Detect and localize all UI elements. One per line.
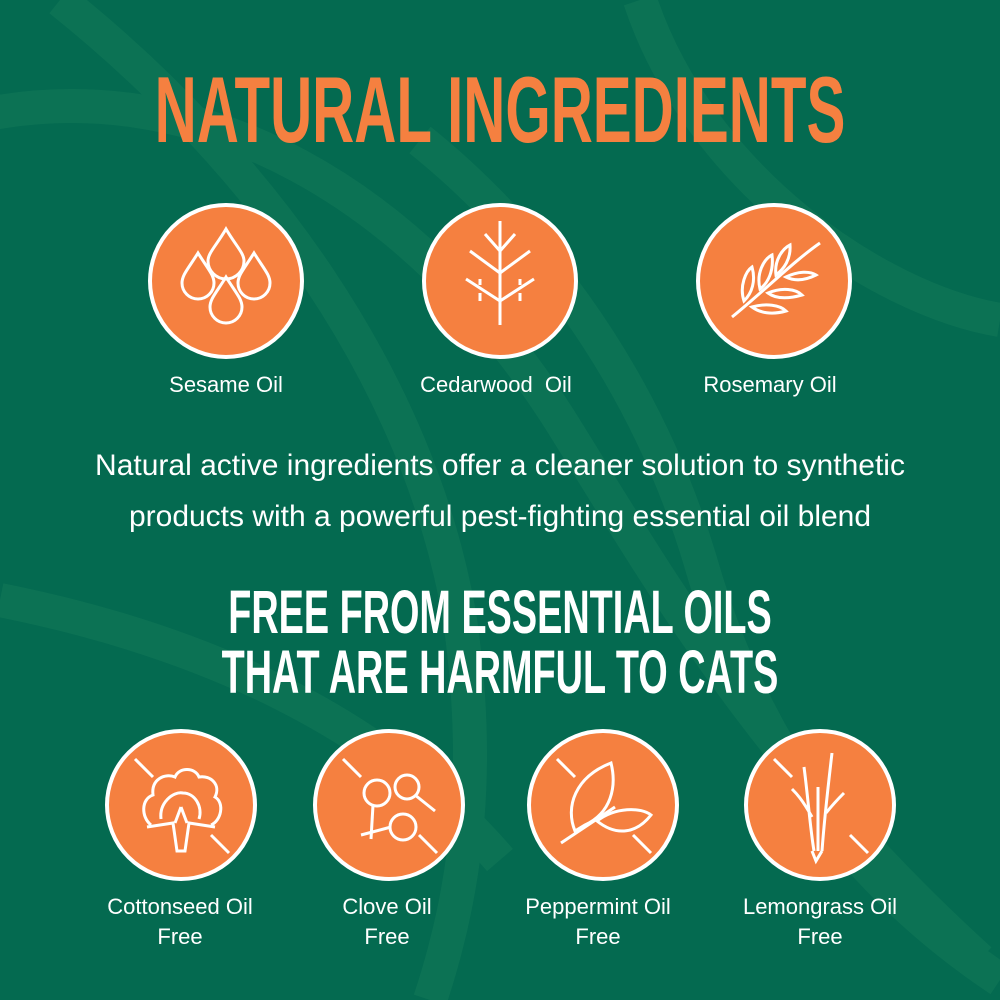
icon: cedarwood	[422, 203, 578, 359]
labels top: Sesame Oil	[169, 372, 283, 397]
labels bottom: Cottonseed Oil	[107, 894, 253, 919]
text: Free	[797, 924, 843, 949]
icon: rosemary	[696, 203, 852, 359]
icon: cotton	[105, 729, 257, 881]
labels bottom	[107, 894, 253, 949]
subheading	[222, 578, 778, 706]
icon: sesame oil drops	[148, 203, 304, 359]
text: Free	[575, 924, 621, 949]
icon: lemongrass	[744, 729, 896, 881]
text: Cedarwood Oil	[420, 372, 572, 397]
icon: peppermint	[527, 729, 679, 881]
paragraph: products with a powerful pest-fighting essential oil blend	[129, 500, 871, 533]
text: Rosemary Oil	[703, 372, 837, 397]
subheading: FREE FROM ESSENTIAL OILS	[228, 578, 772, 646]
title: NATURAL INGREDIENTS	[155, 57, 845, 162]
subheading: THAT ARE HARMFUL TO CATS	[222, 638, 778, 706]
labels bottom: Free	[157, 924, 203, 949]
text: Peppermint Oil	[525, 894, 671, 919]
paragraph	[95, 449, 905, 533]
icon: clove	[313, 729, 465, 881]
text: Clove Oil	[342, 894, 432, 919]
text: Lemongrass Oil	[743, 894, 897, 919]
text: Free	[364, 924, 410, 949]
paragraph: Natural active ingredients offer a cleaner solution to synthetic	[95, 449, 905, 482]
